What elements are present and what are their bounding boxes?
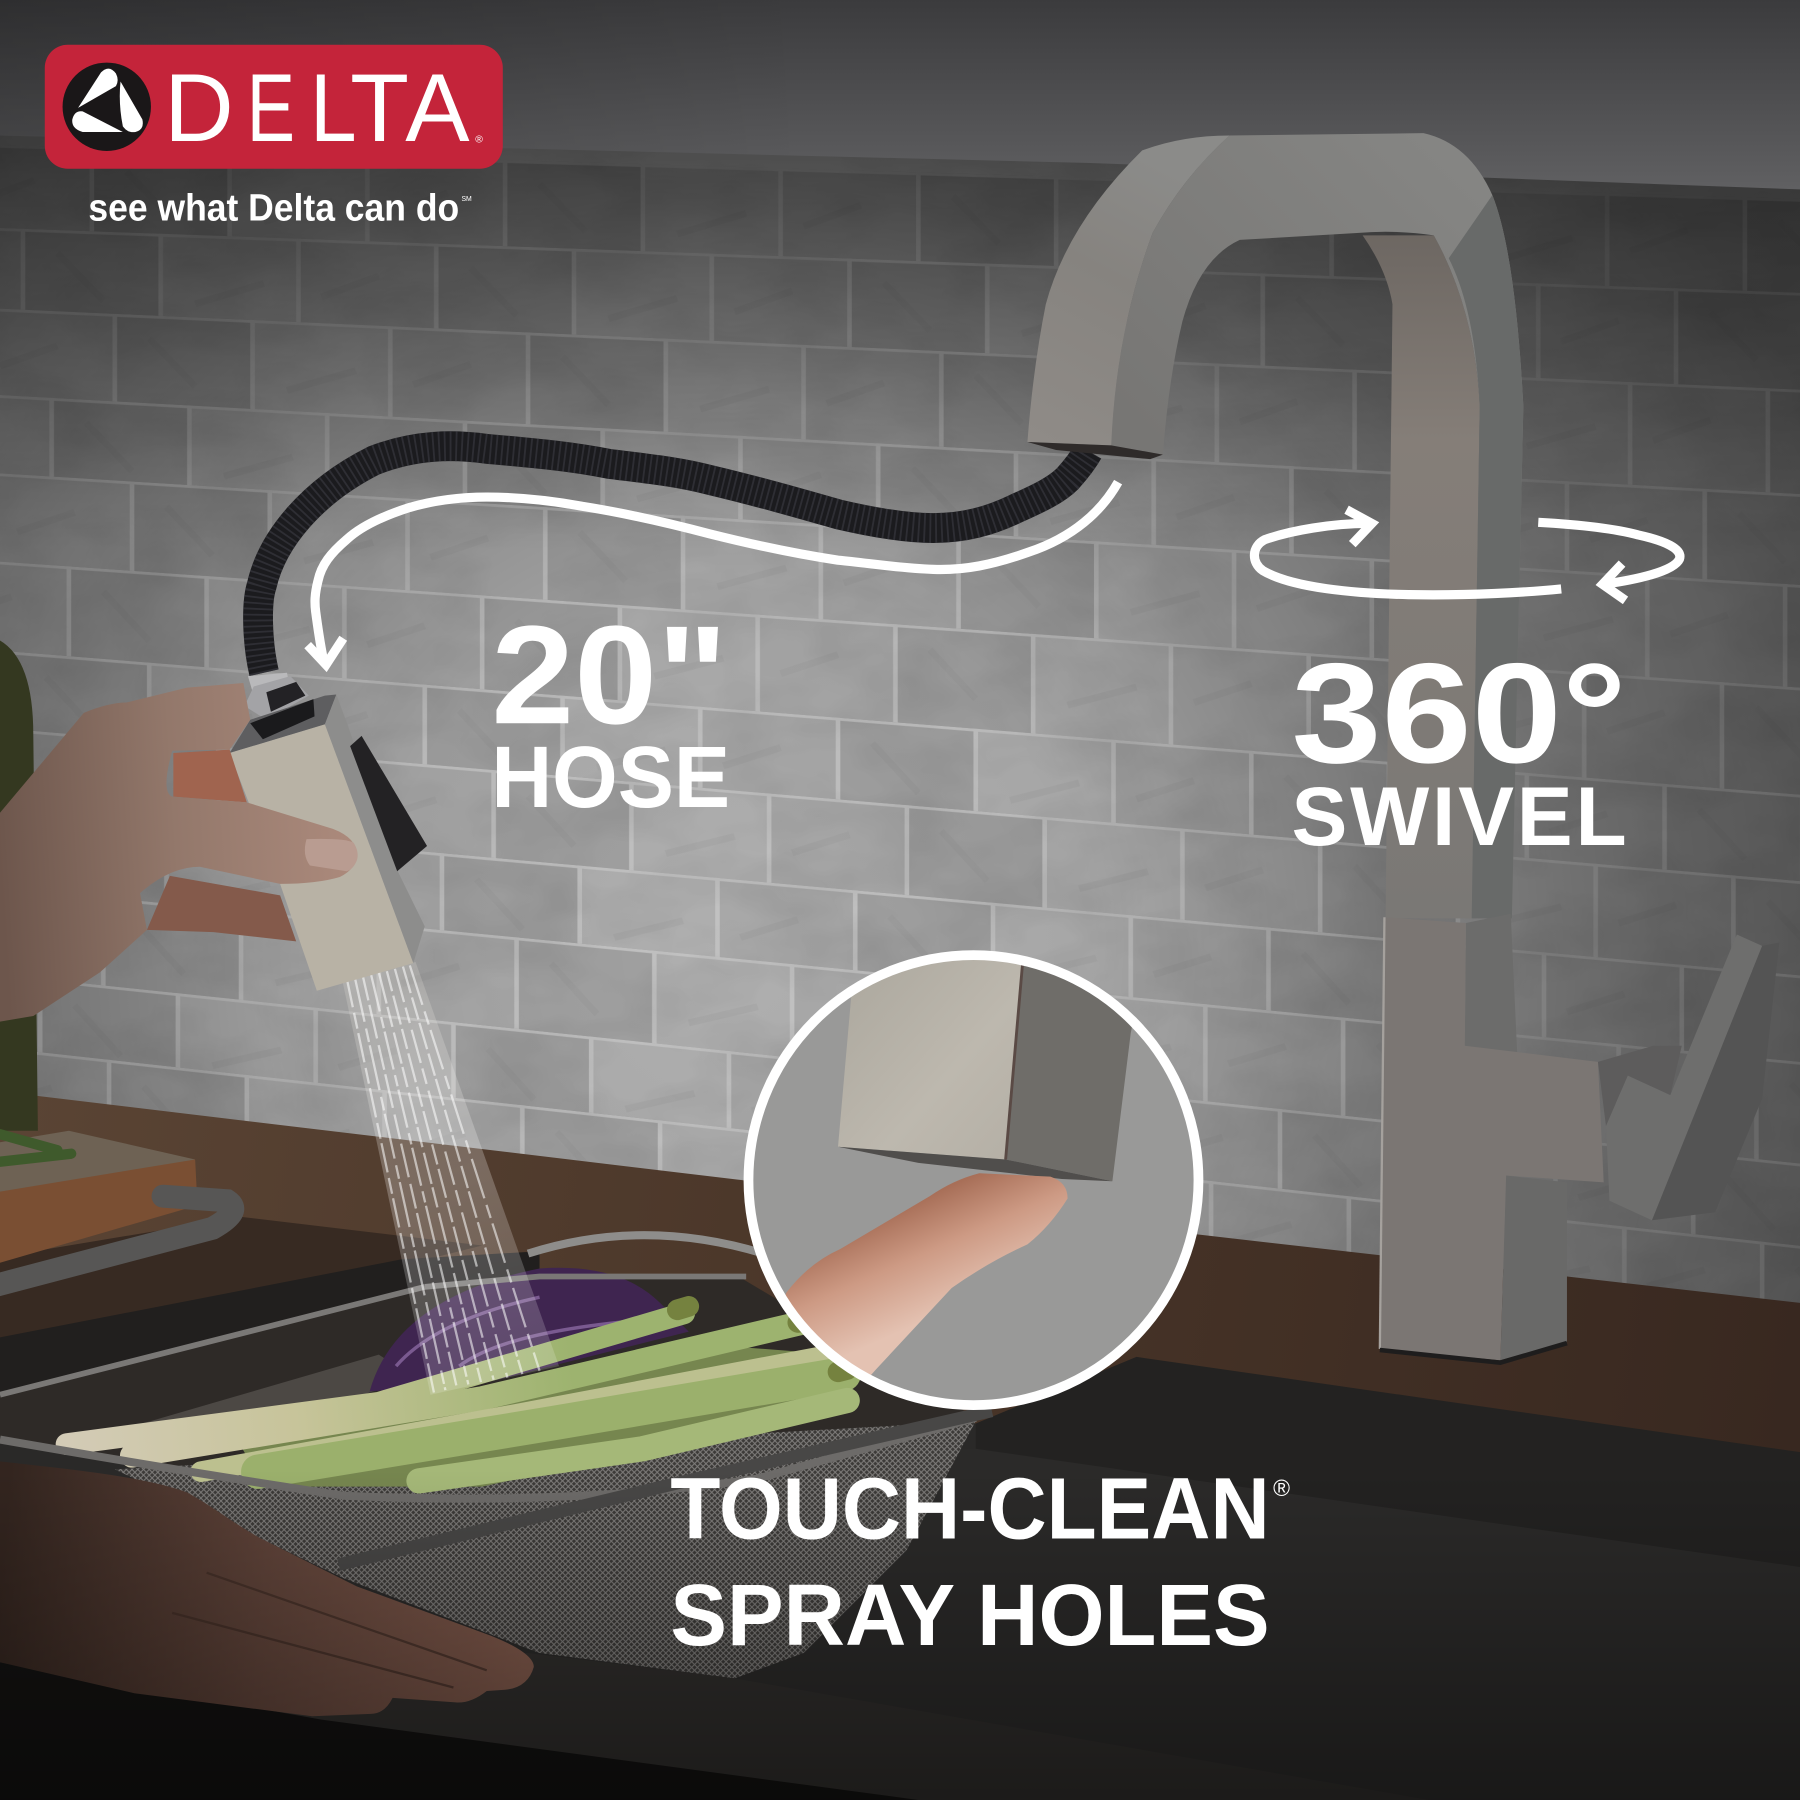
- panel: strainer basket: [0, 1235, 992, 1678]
- heading: touch-clean spray holes: SPRAY HOLES: [670, 1567, 1270, 1664]
- heading: touch-clean spray holes: [670, 1460, 1290, 1664]
- logo: Delta red badge: ®: [475, 134, 483, 145]
- icon: lower hand on counter: [0, 1461, 534, 1716]
- rim: [0, 1418, 976, 1499]
- icon: cutting board and handle: [0, 1131, 233, 1286]
- thumbnail: [305, 839, 358, 871]
- wordmark: E: [247, 55, 295, 163]
- tagline: see what Delta can do: [88, 187, 459, 229]
- icon: Delta triangle emblem: [63, 63, 151, 151]
- logo: Delta red badge: [45, 45, 503, 169]
- wordmark: A: [405, 55, 470, 162]
- wordmark: L: [310, 55, 357, 163]
- panel: tiled backsplash wall: [0, 115, 1800, 1386]
- fingers gap colour: [173, 750, 247, 802]
- panel: touch-clean inset circle: [748, 947, 1198, 1412]
- panel: wood countertop: [0, 1091, 1800, 1481]
- icon: black braided hose: [258, 446, 1088, 673]
- body: [230, 724, 413, 991]
- arrow: 20 inch hose length: [308, 482, 1118, 665]
- asparagus: [67, 1306, 847, 1487]
- icon: bottle at left: [0, 641, 38, 1131]
- heading: 360 degree swivel: [1291, 634, 1627, 863]
- wordmark: T: [350, 55, 409, 162]
- cabbage: [370, 1268, 689, 1391]
- top plate: [230, 695, 336, 753]
- button: [350, 736, 427, 871]
- heading: touch-clean spray holes: TOUCH-CLEAN: [670, 1460, 1270, 1557]
- heading: 20 inch hose: HOSE: [491, 729, 730, 826]
- heading: touch-clean spray holes: ®: [1273, 1475, 1290, 1501]
- lower finger: [147, 876, 296, 941]
- icon: main faucet spout and column: [1027, 133, 1523, 918]
- overlay: bottom shade: [0, 1469, 1800, 1800]
- panel: dark foreground counter: [0, 1653, 1429, 1800]
- connector: [248, 673, 290, 696]
- icon: pull-down sprayhead held in hand: [0, 673, 427, 1022]
- upper hand: [0, 683, 357, 1022]
- tagline: SM: [461, 196, 472, 203]
- heading: 20 inch hose: [491, 596, 730, 826]
- icon: spray head close-up: [838, 947, 1142, 1181]
- wordmark: [164, 55, 470, 163]
- icon: water spray: [342, 962, 559, 1395]
- panel: sink and dark counter: [0, 1217, 1800, 1800]
- chrome strip: [325, 695, 425, 963]
- icon: faucet base: [1380, 914, 1604, 1363]
- wordmark: D: [164, 55, 234, 162]
- mesh: [115, 1421, 976, 1678]
- heading: 20 inch hose: 20": [491, 596, 728, 753]
- heading: 360 degree swivel: 360°: [1291, 634, 1627, 793]
- icon: fingertip: [786, 1173, 1068, 1375]
- panel: upper wall band: [0, 0, 1800, 189]
- icon: faucet lever handle: [1598, 934, 1779, 1220]
- heading: 360 degree swivel: SWIVEL: [1291, 769, 1627, 863]
- arrow: 360 degree swivel rotation: [1254, 510, 1680, 600]
